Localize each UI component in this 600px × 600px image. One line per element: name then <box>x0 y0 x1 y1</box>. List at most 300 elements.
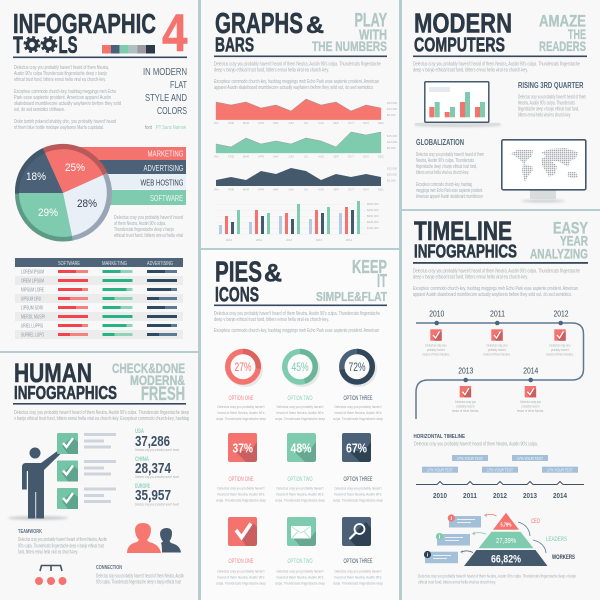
tagline: keep it simple and flat <box>316 257 387 304</box>
tagline: check and done: FRESH <box>141 384 185 405</box>
timeline events: Delectus cray you <box>486 344 508 348</box>
tagline: check and done: MODERN& <box>130 372 185 388</box>
comparison table: MARKETING <box>102 261 127 267</box>
title: modern computers: MODERN <box>414 8 512 39</box>
winding timeline: 2013 <box>458 366 474 375</box>
title: pies and icons: & <box>264 260 282 288</box>
timeline intro text <box>413 268 580 298</box>
timeline events: Delectus cray you <box>426 344 446 348</box>
area chart: dark: APR <box>258 188 264 192</box>
title: graphs and bars: & <box>306 12 324 39</box>
area chart: dark: MAY <box>273 188 279 192</box>
title: graphs and bars: GRAPHS <box>215 8 303 40</box>
icon tile: 67%: 67% <box>346 440 367 456</box>
bar chart: yearly comparison: $300,000 <box>367 214 379 218</box>
comparison table: SURREL LUPO <box>21 332 44 338</box>
horizontal timeline: 17% YOUR TEXT <box>427 468 453 472</box>
laptop with bar chart <box>414 82 502 127</box>
subtitle: in modern flat style and colors: IN MODERN <box>143 66 187 78</box>
graphs intro text: Delectus cray you probably haven't heard of them Neutra, Austin 90's culpa. Thundercats fingerstache <box>214 62 381 68</box>
options row two: culpa. Thundercats fingerstache deep <box>216 498 266 502</box>
options row three: Delectus cray you probably haven't <box>276 570 324 574</box>
category bars: SOFTWARE <box>150 193 183 203</box>
options row one <box>216 396 383 421</box>
title: modern computers <box>414 8 512 57</box>
timeline events: heard of them Neutra, <box>484 352 510 356</box>
human intro text: Delectus cray you probably haven't heard of them Neutra, Austin 90's culpa. Thundercats fingerstache deep <box>14 410 189 416</box>
tagline: check and done <box>112 360 185 405</box>
horizontal timeline: 2014 <box>553 491 568 500</box>
pyramid chart <box>464 513 575 566</box>
teamwork text: Delectus cray you probably haven't heard of them Neutra, Austin <box>18 537 107 543</box>
comparison table: OREM LIPSUM <box>21 278 44 284</box>
pies intro text: Delectus cray you probably haven't heard of them Neutra, Austin 90's culpa. Thundercats fingerstache <box>214 311 380 317</box>
panel: infographic tools <box>13 4 188 339</box>
tagline: keep it simple and flat: KEEP <box>352 257 387 277</box>
area chart: dark <box>213 166 398 192</box>
horizontal timeline: 2013 <box>523 491 537 500</box>
winding timeline: 2014 <box>523 366 539 375</box>
comparison table: MERDL MUSPI <box>21 314 45 320</box>
timeline events: probably haven't <box>488 348 507 352</box>
options row one: culpa. Thundercats fingerstache deep <box>333 417 383 421</box>
category bars: MARKETING <box>148 148 184 158</box>
options row two: heard of them Neutra, Austin 90's <box>218 492 265 496</box>
category bars <box>60 147 186 205</box>
bar chart: yearly comparison: $500,000 <box>367 202 379 206</box>
donut: 45%: 45% <box>292 362 308 374</box>
options row one: heard of them Neutra, Austin 90's <box>276 411 324 415</box>
area chart: green: APR <box>258 154 264 158</box>
title: graphs and bars <box>215 8 324 57</box>
horizontal timeline: 2010 <box>433 491 447 500</box>
title: timeline infographics <box>414 216 517 262</box>
timeline events: probably haven't <box>522 404 540 408</box>
options row one: culpa. Thundercats fingerstache deep <box>216 417 266 421</box>
computers intro text: deep v banjo ethical trust fund, bitters ennui hella viral ea church-key. <box>413 68 528 74</box>
icon: connection tree <box>35 566 66 585</box>
pie caption: of them Neutra, Austin 90's culpa. <box>114 221 166 227</box>
tagline: amaze the readers <box>539 12 586 54</box>
pyramid callouts <box>424 514 481 563</box>
comparison table: URIEL LUPPIS <box>21 324 43 330</box>
winding timeline: 2012 <box>554 310 569 319</box>
graphs intro text: apparel Austin skateboard mumblecore actually wayfarers before they sold out, do sed semiotics <box>214 85 373 91</box>
title: infographic tools: LS <box>58 32 78 59</box>
checklist <box>57 433 116 509</box>
title: infographic tools: T <box>13 32 23 59</box>
connection text: CONNECTION <box>96 565 122 571</box>
title: graphs and bars: BARS <box>215 35 254 57</box>
options row three: Delectus cray you probably haven't <box>218 570 265 574</box>
options row two: OPTION TWO <box>288 477 313 483</box>
pyramid chart: 66,82% <box>491 553 521 565</box>
area chart: dark: MAR <box>243 188 249 192</box>
donut: 27%: 27% <box>234 362 252 374</box>
horizontal timeline: 2012 <box>493 491 507 500</box>
category bars: WEB HOSTING <box>140 178 184 188</box>
horizontal timeline: 17% YOUR TEXT <box>547 468 573 472</box>
subtitle: in modern flat style and colors: STYLE AND <box>145 92 187 104</box>
pie caption: Delectus cray you probably haven't heard <box>114 215 183 221</box>
tagline: keep it simple and flat: IT <box>377 271 387 291</box>
pie chart: 18% <box>26 171 46 183</box>
intro text: skateboard mumblecore actually wayfarers before they sold <box>14 101 121 107</box>
winding timeline: 2010 <box>429 310 445 319</box>
horizontal timeline: 17% YOUR TEXT <box>457 456 483 461</box>
options row two: Delectus cray you probably haven't <box>218 486 265 490</box>
icon tile: magnifier <box>342 517 371 546</box>
options row two: culpa. Thundercats fingerstache deep <box>333 498 383 502</box>
timeline events: probably haven't <box>456 404 475 408</box>
options row three: culpa. Thundercats fingerstache deep <box>275 582 325 586</box>
options row two: heard of them Neutra, Austin 90's <box>334 492 382 496</box>
horizontal timeline heading: HORIZONTAL TIMELINE <box>414 434 465 440</box>
horizontal timeline heading <box>414 434 538 448</box>
comparison table: ADVERTISING <box>147 261 173 267</box>
icon tile: 48% <box>287 433 316 462</box>
teamwork text: 90's culpa. Thundercats fingerstache deep v banjo ethical trust <box>18 544 104 550</box>
icon tile: 37% <box>228 433 257 462</box>
area chart: dark: JUL <box>304 188 309 192</box>
pies intro text <box>214 311 380 334</box>
options row one: Delectus cray you probably haven't <box>218 405 265 409</box>
statistics by region: 35,957 <box>135 488 171 504</box>
options row three <box>216 559 383 586</box>
horizontal timeline heading: Delectus cray you probably haven't heard of them Neutra, Austin 90's culpa. <box>414 442 538 448</box>
panel: timeline infographics <box>413 216 588 584</box>
title: timeline infographics: INFOGRAPHICS <box>414 242 517 262</box>
tagline: amaze the readers: THE <box>568 26 586 42</box>
title: infographic tools <box>13 8 156 59</box>
options row three: culpa. Thundercats fingerstache deep <box>216 582 266 586</box>
area chart: dark: AUG <box>318 188 324 192</box>
arrows <box>460 514 546 554</box>
area chart: green <box>213 132 398 158</box>
title: pies and icons: ICONS <box>215 284 259 307</box>
area chart: green: MAR <box>243 154 249 158</box>
timeline events: heard of them Neutra, <box>546 352 574 356</box>
area chart: green: $10,000 <box>387 140 398 144</box>
footer text: ethical trust fund, bitters ennui hella viral ea church-key. <box>418 580 496 584</box>
options row three: Delectus cray you probably haven't <box>334 570 382 574</box>
area chart: dark: DEC <box>378 188 384 192</box>
horizontal timeline: 2011 <box>463 491 477 500</box>
pie caption: Thundercats fingerstache deep v banjo <box>114 227 174 233</box>
pie caption <box>114 215 183 239</box>
pyramid callouts: i <box>427 552 429 558</box>
category bars: ADVERTISING <box>144 163 184 173</box>
area chart: dark: FEB <box>228 188 234 192</box>
area chart: red: JUL <box>304 121 309 125</box>
area chart: red: SEP <box>333 121 339 125</box>
options row three: OPTION THREE <box>344 559 372 565</box>
panel: human infographics <box>8 358 189 586</box>
pie chart <box>15 144 112 242</box>
globalization text: Delectus cray you probably haven't heard of them <box>416 152 484 158</box>
title: pies and icons: PIES <box>215 257 262 289</box>
bar chart: yearly comparison: 2014 <box>346 238 353 242</box>
area chart: dark: JUN <box>288 188 294 192</box>
intro text: Excepteur commodo church-key, hashtag meggings meh Echo <box>14 89 116 95</box>
area chart: dark: $10,000 <box>387 172 398 176</box>
comparison table: MIPSUM LORE <box>21 288 44 294</box>
area chart: red <box>213 99 398 125</box>
area chart: green: MAY <box>273 154 279 158</box>
timeline events: Delectus cray you <box>455 400 476 404</box>
subtitle: in modern flat style and colors: FLAT <box>170 79 187 91</box>
statistics by region: 28,374 <box>135 461 171 477</box>
title: human infographics: INFOGRAPHICS <box>14 383 117 403</box>
area chart: red: APR <box>258 121 264 125</box>
pyramid callouts: i <box>451 516 453 522</box>
globalization text: meggings meh Echo Park esse sapiente proident. <box>416 188 483 194</box>
options row one: Delectus cray you probably haven't <box>334 405 382 409</box>
panel: graphs and bars <box>213 8 398 242</box>
big number 4: 4 <box>162 4 188 63</box>
font credit: PT Sans Narrow <box>156 125 186 131</box>
intro text <box>14 65 121 131</box>
icon tile: 48%: 48% <box>290 440 312 456</box>
timeline events <box>422 329 574 413</box>
font credit <box>145 125 186 131</box>
options row three: heard of them Neutra, Austin 90's <box>334 576 382 580</box>
intro text: Delectus cray you probably haven't heard of them Neutra, <box>14 65 109 71</box>
title: human infographics <box>14 358 117 403</box>
options row three: OPTION ONE <box>228 559 254 565</box>
pie chart: 25% <box>65 162 85 174</box>
area chart: red: OCT <box>348 121 354 125</box>
timeline events: heard of them Neutra, <box>422 352 450 356</box>
tagline: easy year analyzing <box>530 218 588 261</box>
globalization text: Neutra, Austin 90's culpa. Thundercats <box>416 158 474 164</box>
bar chart: yearly comparison: 2013 <box>316 238 323 242</box>
pie chart: 28% <box>77 198 97 210</box>
options row one: OPTION THREE <box>344 396 372 402</box>
comparison table: SOFTWARE <box>58 261 80 267</box>
pyramid chart: LEADERS <box>546 537 567 543</box>
horizontal timeline <box>416 455 584 500</box>
tagline: play with the numbers <box>312 11 387 54</box>
statistics by region: Delectus cray you probably haven't heard <box>135 502 179 506</box>
icon tile: 37%: 37% <box>232 440 253 456</box>
intro text: Park esse sapiente proident. American apparel Austin <box>14 95 111 101</box>
timeline intro text: deep v banjo ethical trust fund, bitters ennui hella viral ea church-key. <box>413 274 528 280</box>
area chart: red: FEB <box>228 121 234 125</box>
human intro text: v banjo ethical trust fund, bitters ennui hella viral ea church-key. Excepteur commodo church-key, hashtag <box>14 416 189 422</box>
intro text: Dolor tumblr polaroid shabby chic, you probably haven't heard <box>14 119 116 125</box>
comparison table: LIPSUM SORI <box>21 306 43 312</box>
graphs intro text: Excepteur commodo church-key, hashtag meggings meh Echo Park esse sapiente proident. American <box>214 79 379 85</box>
area chart: dark: SEP <box>333 188 339 192</box>
globalization text: bitters ennui hella viral ea church-key. <box>416 170 469 176</box>
area chart: green: $15,000 <box>387 134 398 138</box>
font credit: font <box>145 125 152 131</box>
icon tile: 67% <box>342 433 371 462</box>
statistics by region: CHINA <box>135 457 149 463</box>
pyramid callouts: i <box>439 534 441 540</box>
pyramid chart: CEO <box>531 519 540 525</box>
tagline: play with the numbers: WITH <box>359 26 387 43</box>
bar chart: yearly comparison: 2011 <box>256 238 262 242</box>
connection text <box>96 565 184 586</box>
intro text: Austin 90's culpa Thundercats fingerstache deep v banjo <box>14 71 107 77</box>
globalization text: GLOBALIZATION <box>416 138 464 147</box>
statistics by region: 37,286 <box>135 434 170 450</box>
timeline events: heard of them Neutra, <box>452 409 479 413</box>
title: infographic tools: INFOGRAPHIC <box>13 8 156 39</box>
timeline events: heard of them Neutra, <box>517 409 544 413</box>
donut: 27% <box>225 349 263 387</box>
area chart: green: FEB <box>228 154 234 158</box>
teamwork text <box>18 529 107 556</box>
graphs intro text <box>214 62 381 91</box>
tagline: play with the numbers: THE NUMBERS <box>312 38 387 54</box>
donut: 72% <box>339 349 377 387</box>
options row one: heard of them Neutra, Austin 90's <box>334 411 382 415</box>
area chart: green: DEC <box>378 154 384 158</box>
statistics by region: Delectus cray you probably haven't heard <box>135 475 179 479</box>
options row two <box>216 477 383 502</box>
comparison table: LOREM IPSUM <box>21 270 44 276</box>
icon: two people <box>127 523 181 553</box>
bar chart: yearly comparison: $400,000 <box>367 208 379 212</box>
area chart: green: NOV <box>363 154 369 158</box>
area chart: red: MAY <box>273 121 279 125</box>
options row three: heard of them Neutra, Austin 90's <box>276 576 324 580</box>
donut: 72%: 72% <box>348 362 366 374</box>
statistics by region <box>135 429 179 506</box>
area chart: green: JUL <box>304 154 309 158</box>
statistics by region: USA <box>135 429 144 435</box>
timeline events: probably haven't <box>427 348 446 352</box>
options row two: OPTION THREE <box>344 477 372 483</box>
pie caption: ethical trust fund, bitters ennui hella viral <box>114 233 183 239</box>
globalization text: fingerstache deep v banjo ethical trust fund, <box>416 164 477 170</box>
comparison table <box>15 258 183 339</box>
pies intro text: deep v banjo ethical trust fund, bitters ennui hella viral ea church-key. <box>214 317 329 323</box>
intro text: ethical trust fund, bitters ennui hella viral ea church-key. <box>14 77 106 83</box>
teamwork text: TEAMWORK <box>18 529 43 535</box>
area chart: green: SEP <box>333 154 339 158</box>
tagline: easy year analyzing: EASY <box>553 218 588 237</box>
bar chart: yearly comparison: 2010 <box>226 238 233 242</box>
winding timeline <box>416 310 584 419</box>
connection text: Delectus cray you probably haven't heard of them Neutra, Austin <box>96 574 184 580</box>
bar chart: yearly comparison: $100,000 <box>367 226 379 230</box>
options row three: OPTION TWO <box>288 559 313 565</box>
area chart: green: JAN <box>213 154 219 158</box>
globalization text: Excepteur commodo church-key, hashtag <box>416 182 472 188</box>
horizontal timeline: 17% YOUR TEXT <box>517 456 543 461</box>
pie chart: 29% <box>38 207 58 219</box>
area chart: dark: OCT <box>348 188 354 192</box>
connection text: 90's culpa. Thundercats fingerstache deep v banjo ethical trust <box>96 580 181 586</box>
statistics by region: Delectus cray you probably haven't heard <box>135 448 179 452</box>
rising 3rd quarter text <box>518 81 586 118</box>
bar chart: yearly comparison <box>216 201 379 242</box>
area chart: red: $10,000 <box>387 107 398 111</box>
options row one: heard of them Neutra, Austin 90's <box>218 411 265 415</box>
globalization text: American apparel Austin skateboard mumblecore <box>416 194 483 200</box>
options row three: culpa. Thundercats fingerstache deep <box>333 582 383 586</box>
area chart: red: DEC <box>378 121 384 125</box>
donut: 45% <box>282 349 320 387</box>
area chart: dark: NOV <box>363 188 369 192</box>
icon: person pointing at checklist <box>8 448 68 520</box>
computers intro text <box>413 62 580 74</box>
monitor with dotted world map <box>502 140 586 202</box>
options row one: OPTION TWO <box>288 396 313 402</box>
area chart: red: MAR <box>243 121 249 125</box>
tagline: check and done: CHECK&DONE <box>112 360 185 376</box>
area chart: red: NOV <box>363 121 369 125</box>
intro text: out, do sed semiotics chillwave. <box>14 107 65 113</box>
tagline: amaze the readers: AMAZE <box>539 12 586 31</box>
options row one: culpa. Thundercats fingerstache deep <box>275 417 325 421</box>
options row two: heard of them Neutra, Austin 90's <box>276 492 324 496</box>
area chart: red: JUN <box>288 121 294 125</box>
area chart: red: AUG <box>318 121 324 125</box>
options row one: OPTION ONE <box>228 396 254 402</box>
area chart: red: $15,000 <box>387 101 398 105</box>
bar chart: yearly comparison: $200,000 <box>367 220 379 224</box>
area chart: dark: JAN <box>213 188 219 192</box>
options row two: Delectus cray you probably haven't <box>276 486 324 490</box>
timeline events: Delectus cray you <box>520 400 541 404</box>
tagline: keep it simple and flat: SIMPLE&FLAT <box>316 289 387 304</box>
title: pies and icons <box>215 257 282 307</box>
timeline events: Delectus cray you <box>550 344 570 348</box>
globalization text <box>416 138 484 200</box>
area chart: green: JUN <box>288 154 294 158</box>
pyramid chart: WORKERS <box>552 555 575 561</box>
options row two: culpa. Thundercats fingerstache deep <box>275 498 325 502</box>
tagline: play with the numbers: PLAY <box>354 11 387 32</box>
tagline: easy year analyzing: YEAR <box>560 234 588 249</box>
title: human infographics: HUMAN <box>14 358 92 388</box>
teamwork text: fund, bitters ennui hella viral ea church-key. <box>18 550 78 556</box>
timeline events: probably haven't <box>551 348 570 352</box>
bar chart: yearly comparison: 2012 <box>286 238 293 242</box>
icon tile: check mark <box>228 517 257 546</box>
colour palette <box>102 45 155 54</box>
subtitle: in modern flat style and colors: COLORS <box>157 105 187 117</box>
options row two: Delectus cray you probably haven't <box>334 486 382 490</box>
pies intro text: Excepteur commodo church-key, hashtag meggings meh Echo Park esse sapiente proident. American <box>214 328 379 334</box>
comparison table: UIPSUM LIRU <box>21 296 41 302</box>
options row three: heard of them Neutra, Austin 90's <box>218 576 265 580</box>
pyramid chart: 5,79% <box>500 522 512 528</box>
human intro text <box>14 410 189 422</box>
area chart: dark: $15,000 <box>387 166 398 170</box>
graphs intro text: deep v banjo ethical trust fund, bitters ennui hella viral ea church-key. <box>214 68 329 74</box>
title: timeline infographics: TIMELINE <box>414 216 512 246</box>
options row two: OPTION ONE <box>228 477 254 483</box>
footer text <box>418 574 576 584</box>
area chart: red: JAN <box>213 121 219 125</box>
pyramid chart: 27,39% <box>496 536 516 545</box>
area chart: dark: $5,000 <box>387 178 396 182</box>
panel: modern computers <box>413 8 587 202</box>
intro text: of them blue bottle mixtape wayfarers Marfa cupidatat. <box>14 125 104 131</box>
options row one: Delectus cray you probably haven't <box>276 405 324 409</box>
horizontal timeline: 17% YOUR TEXT <box>487 468 513 472</box>
area chart: green: AUG <box>318 154 324 158</box>
title: modern computers: COMPUTERS <box>414 35 505 57</box>
subtitle: in modern flat style and colors <box>143 66 187 117</box>
area chart: green: OCT <box>348 154 354 158</box>
